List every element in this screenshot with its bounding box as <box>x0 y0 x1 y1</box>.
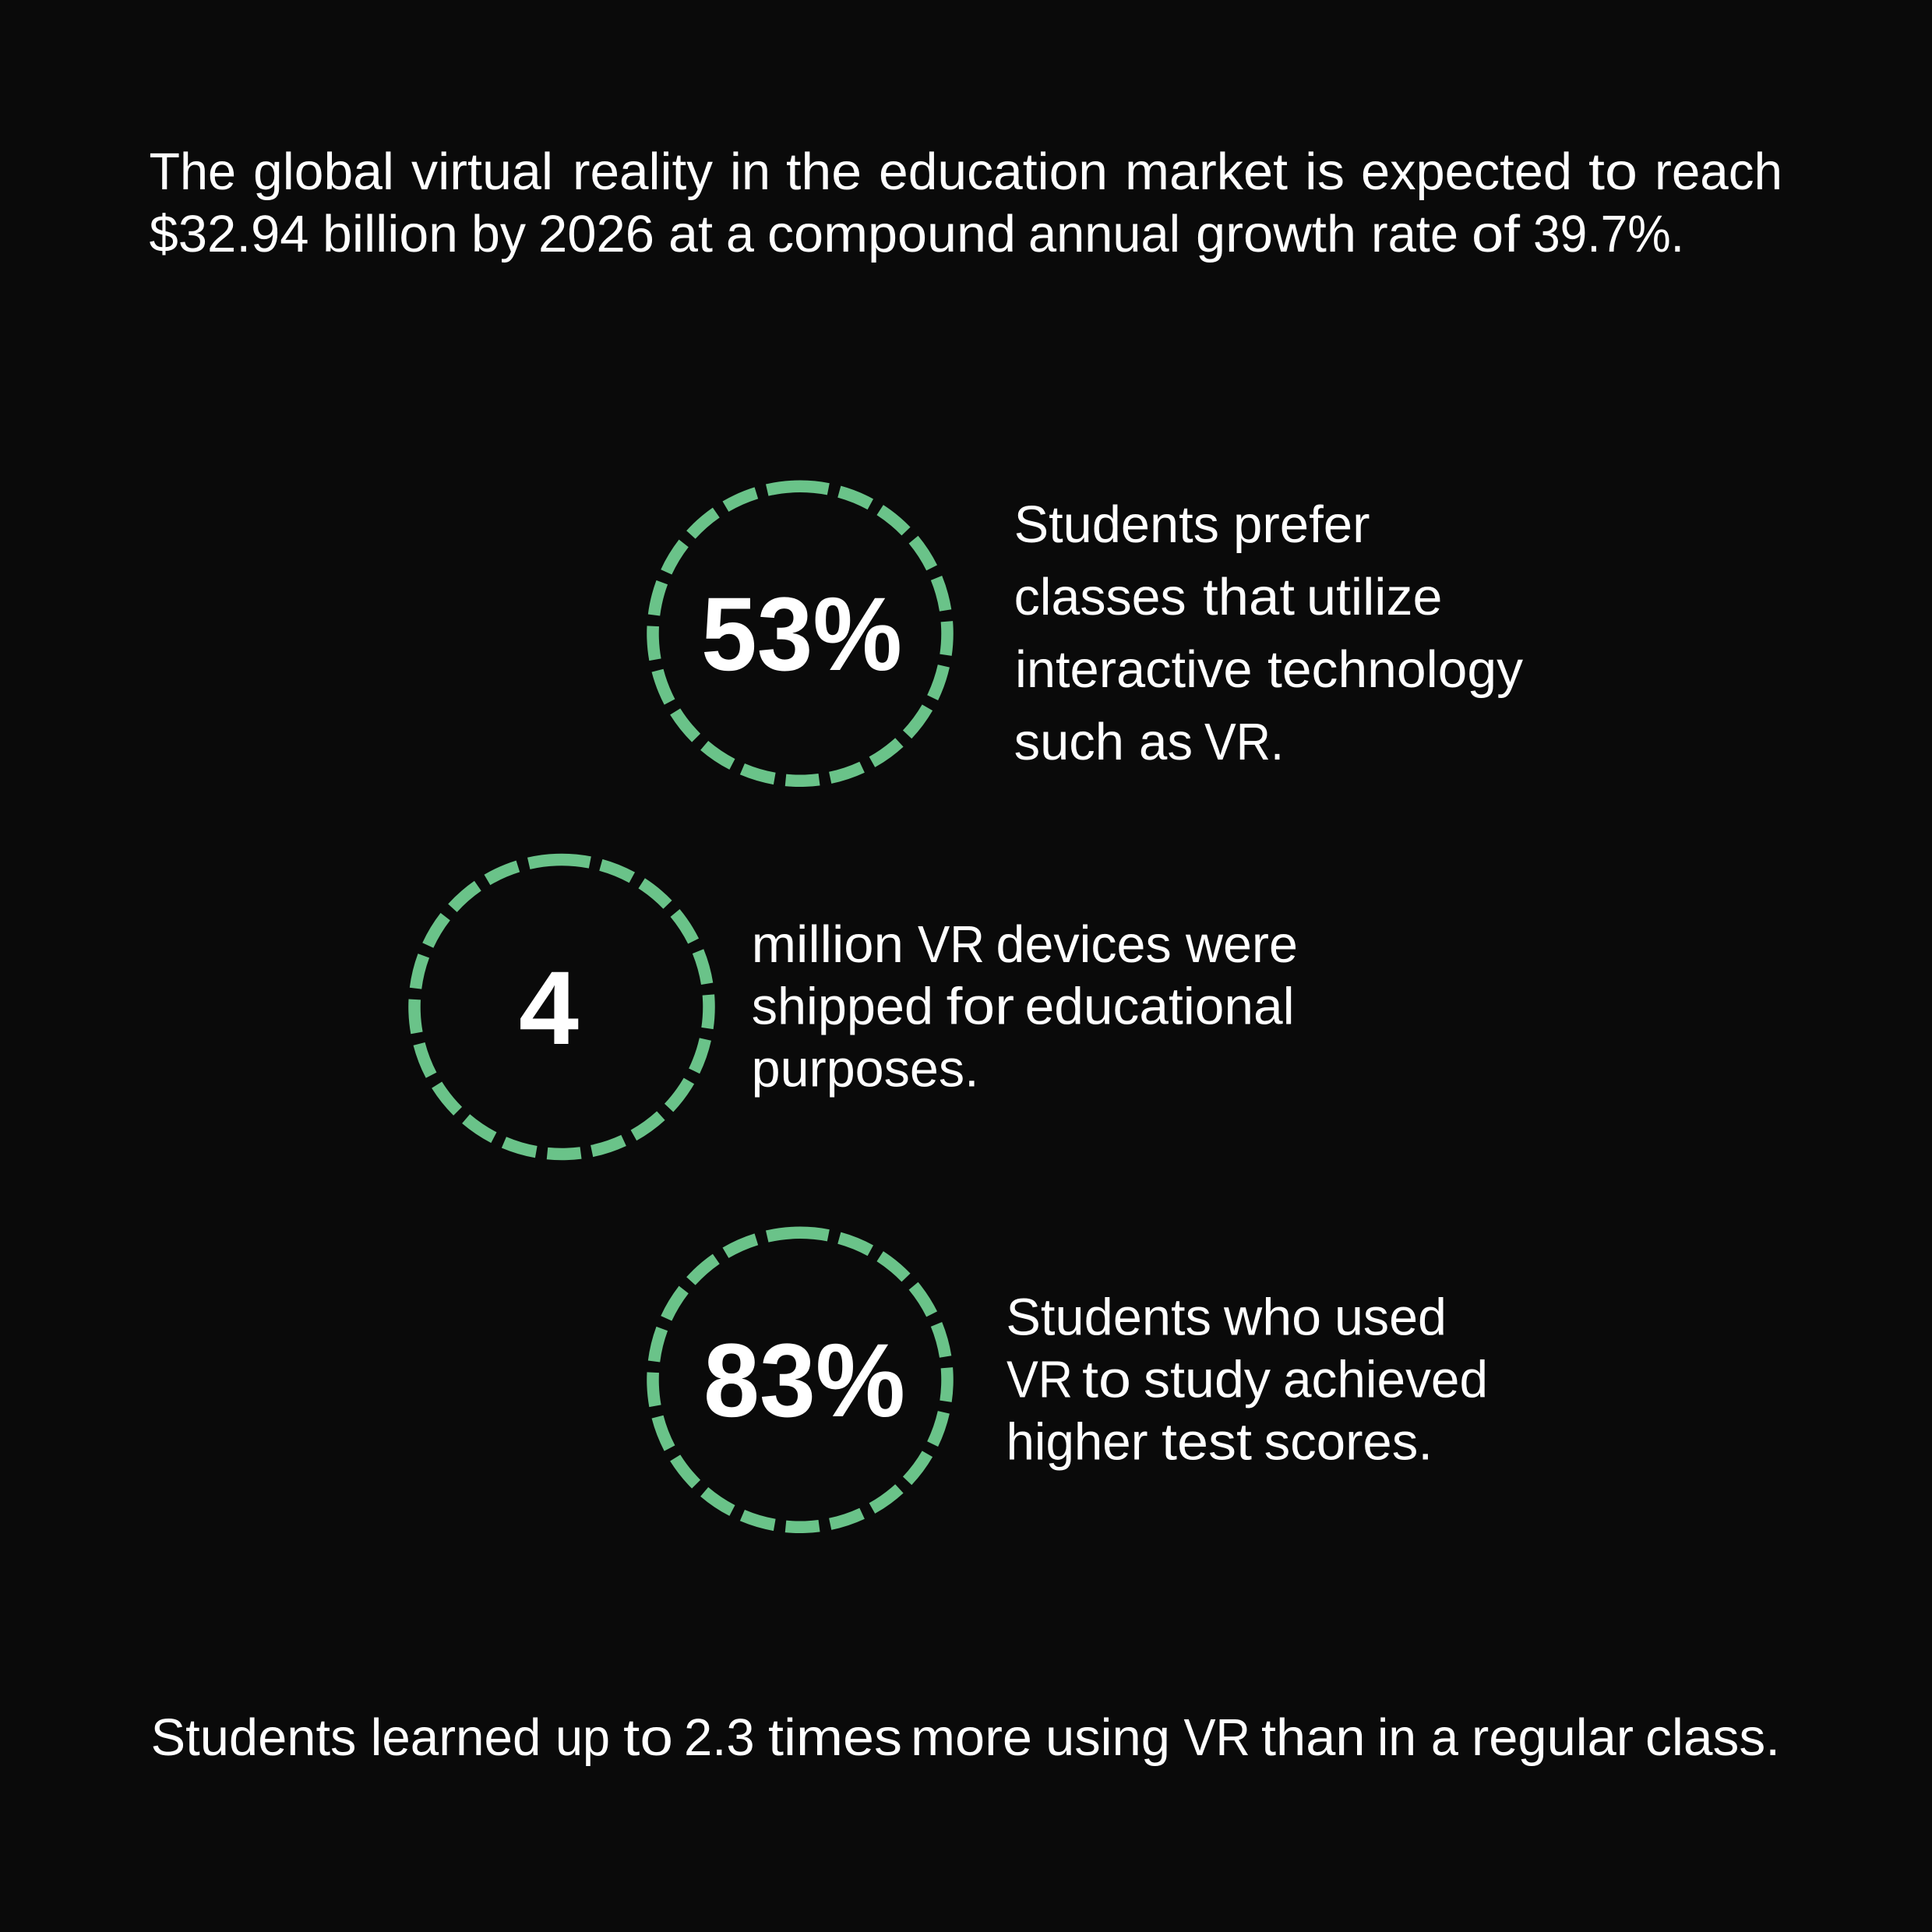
description: students prefer: Students <box>1014 495 1219 554</box>
description: higher test scores: test <box>1162 1412 1252 1471</box>
intro text block <box>150 143 1782 263</box>
intro text block: in <box>730 143 770 201</box>
description: VR devices shipped: purposes. <box>752 1039 979 1098</box>
footer text block: learned <box>371 1708 541 1767</box>
intro text block: virtual <box>411 143 553 201</box>
intro text block: expected <box>1361 143 1572 201</box>
intro text block: rate <box>1371 205 1458 263</box>
intro text block: growth <box>1196 205 1356 263</box>
description: VR devices shipped: were <box>1185 915 1298 974</box>
footer text block: class. <box>1645 1708 1780 1767</box>
description: higher test scores: who <box>1223 1288 1321 1346</box>
description: students prefer: that <box>1203 568 1295 626</box>
intro text block: compound <box>767 205 1016 263</box>
footer text block: VR <box>1184 1708 1250 1767</box>
description: VR devices shipped: shipped <box>752 977 933 1035</box>
footer text block: more <box>911 1708 1032 1767</box>
value: 4: 4 <box>519 950 579 1066</box>
description: students prefer <box>1014 495 1524 771</box>
footer text block: Students <box>151 1708 357 1767</box>
intro text block: annual <box>1028 205 1180 263</box>
description: higher test scores: VR <box>1007 1350 1073 1408</box>
dashed ring: 83% <box>648 1228 952 1532</box>
intro text block: to <box>1588 143 1638 201</box>
description: higher test scores <box>1006 1288 1488 1471</box>
description: students prefer: such <box>1014 713 1124 771</box>
description: higher test scores: scores. <box>1264 1412 1433 1471</box>
description: students prefer: utilize <box>1306 568 1443 626</box>
description: VR devices shipped <box>752 915 1298 1098</box>
intro text block: reach <box>1655 143 1782 201</box>
description: VR devices shipped: for <box>947 977 1014 1035</box>
panel: 83% statistic <box>648 1228 1488 1532</box>
intro text block: at <box>668 205 713 263</box>
description: VR devices shipped: VR <box>918 915 985 974</box>
intro text block: is <box>1305 143 1345 201</box>
description: students prefer: prefer <box>1233 495 1370 554</box>
intro text block: of <box>1472 205 1520 263</box>
intro text block: 2026 <box>538 205 654 263</box>
dashed ring: 53% <box>648 481 952 786</box>
description: students prefer: VR. <box>1204 713 1284 771</box>
description: students prefer: classes <box>1014 568 1186 626</box>
footer text block: regular <box>1472 1708 1634 1767</box>
intro text block: the <box>786 143 862 201</box>
description: higher test scores: study <box>1144 1350 1271 1408</box>
description: higher test scores: used <box>1334 1288 1447 1346</box>
description: VR devices shipped: million <box>752 915 904 974</box>
footer text block: in <box>1377 1708 1416 1767</box>
intro text block: $32.94 <box>150 205 308 263</box>
description: students prefer: interactive <box>1015 640 1253 699</box>
footer text block: a <box>1431 1708 1459 1767</box>
dashed ring: 4 <box>410 855 714 1159</box>
description: higher test scores: achieved <box>1283 1350 1488 1408</box>
intro text block: global <box>253 143 394 201</box>
intro text block: a <box>726 205 755 263</box>
footer text block: than <box>1261 1708 1365 1767</box>
description: higher test scores: higher <box>1007 1412 1148 1471</box>
intro text block: 39.7%. <box>1533 205 1684 263</box>
intro text block: education <box>879 143 1108 201</box>
description: students prefer: technology <box>1267 640 1524 699</box>
footer text block: times <box>768 1708 902 1767</box>
intro text block: billion <box>323 205 458 263</box>
footer text block <box>151 1708 1780 1767</box>
intro text block: by <box>471 205 526 263</box>
footer text block: using <box>1045 1708 1170 1767</box>
description: higher test scores: to <box>1082 1350 1131 1408</box>
intro text block: reality <box>573 143 713 201</box>
footer text block: up <box>555 1708 610 1767</box>
footer text block: 2.3 <box>684 1708 755 1767</box>
panel: 4 million statistic <box>410 855 1298 1159</box>
footer text block: to <box>623 1708 673 1767</box>
value: 83%: 83% <box>703 1323 905 1439</box>
panel: 53% statistic <box>648 481 1524 786</box>
description: higher test scores: Students <box>1006 1288 1211 1346</box>
description: VR devices shipped: educational <box>1025 977 1295 1035</box>
intro text block: The <box>150 143 236 201</box>
intro text block: market <box>1125 143 1288 201</box>
value: 53%: 53% <box>701 576 902 693</box>
description: students prefer: as <box>1139 713 1193 771</box>
description: VR devices shipped: devices <box>996 915 1172 974</box>
